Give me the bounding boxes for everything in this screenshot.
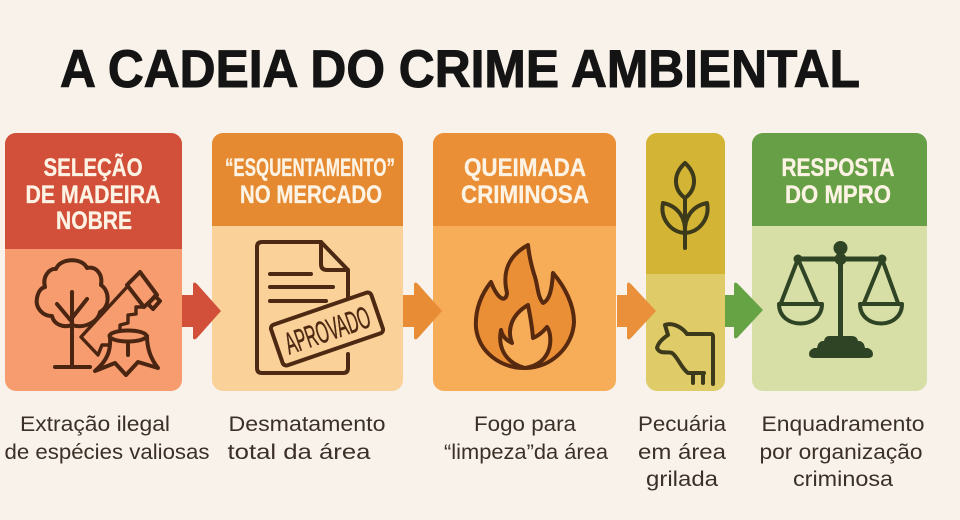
panel: esquentamento no mercado (212, 133, 403, 391)
arrow 4 (725, 282, 763, 338)
panel: pecuária (646, 133, 725, 391)
panel: queimada criminosa (433, 133, 616, 391)
stamp: aprovado: APROVADO (280, 300, 375, 361)
title: A CADEIA DO CRIME AMBIENTAL (60, 40, 860, 99)
heading: queimada criminosa: CRIMINOSA (461, 181, 589, 209)
heading: resposta do MPRO: RESPOSTA (782, 154, 894, 182)
heading: esquentamento no mercado: “ESQUENTAMENTO” (225, 154, 395, 182)
caption: pecuária em área grilada: Pecuária (638, 413, 726, 436)
caption: enquadramento: Enquadramento (762, 413, 924, 436)
heading: resposta do MPRO: DO MPRO (785, 181, 891, 209)
caption: enquadramento: por organização (760, 441, 922, 464)
arrow 2 (403, 282, 442, 340)
icon: cow (657, 324, 713, 384)
icon: approved document (257, 242, 384, 373)
caption: extração ilegal: Extração ilegal (20, 413, 170, 436)
caption: enquadramento: criminosa (793, 468, 893, 491)
icon: plant (662, 163, 708, 248)
icon: scales of justice (779, 243, 902, 358)
caption: desmatamento: total da área (228, 441, 371, 464)
caption: extração ilegal: de espécies valiosas (4, 441, 210, 464)
arrow 3 (617, 282, 656, 340)
arrow 1 (182, 282, 221, 340)
heading: seleção de madeira nobre: SELEÇÃO (44, 152, 142, 182)
icon: tree, saw and stump (37, 260, 160, 375)
caption: pecuária em área grilada: grilada (646, 468, 718, 491)
caption: fogo para limpeza: Fogo para (474, 413, 576, 436)
panel: seleção de madeira nobre (5, 133, 182, 391)
caption: pecuária em área grilada: em área (638, 441, 726, 464)
heading: queimada criminosa: QUEIMADA (464, 154, 586, 182)
heading: seleção de madeira nobre: DE MADEIRA (26, 181, 160, 209)
icon: flame (476, 245, 574, 368)
heading: esquentamento no mercado: NO MERCADO (240, 181, 382, 209)
caption: fogo para limpeza: “limpeza”da área (444, 441, 608, 464)
heading: seleção de madeira nobre: NOBRE (56, 207, 132, 235)
caption: desmatamento: Desmatamento (228, 413, 386, 436)
panel: resposta do MPRO (752, 133, 927, 391)
